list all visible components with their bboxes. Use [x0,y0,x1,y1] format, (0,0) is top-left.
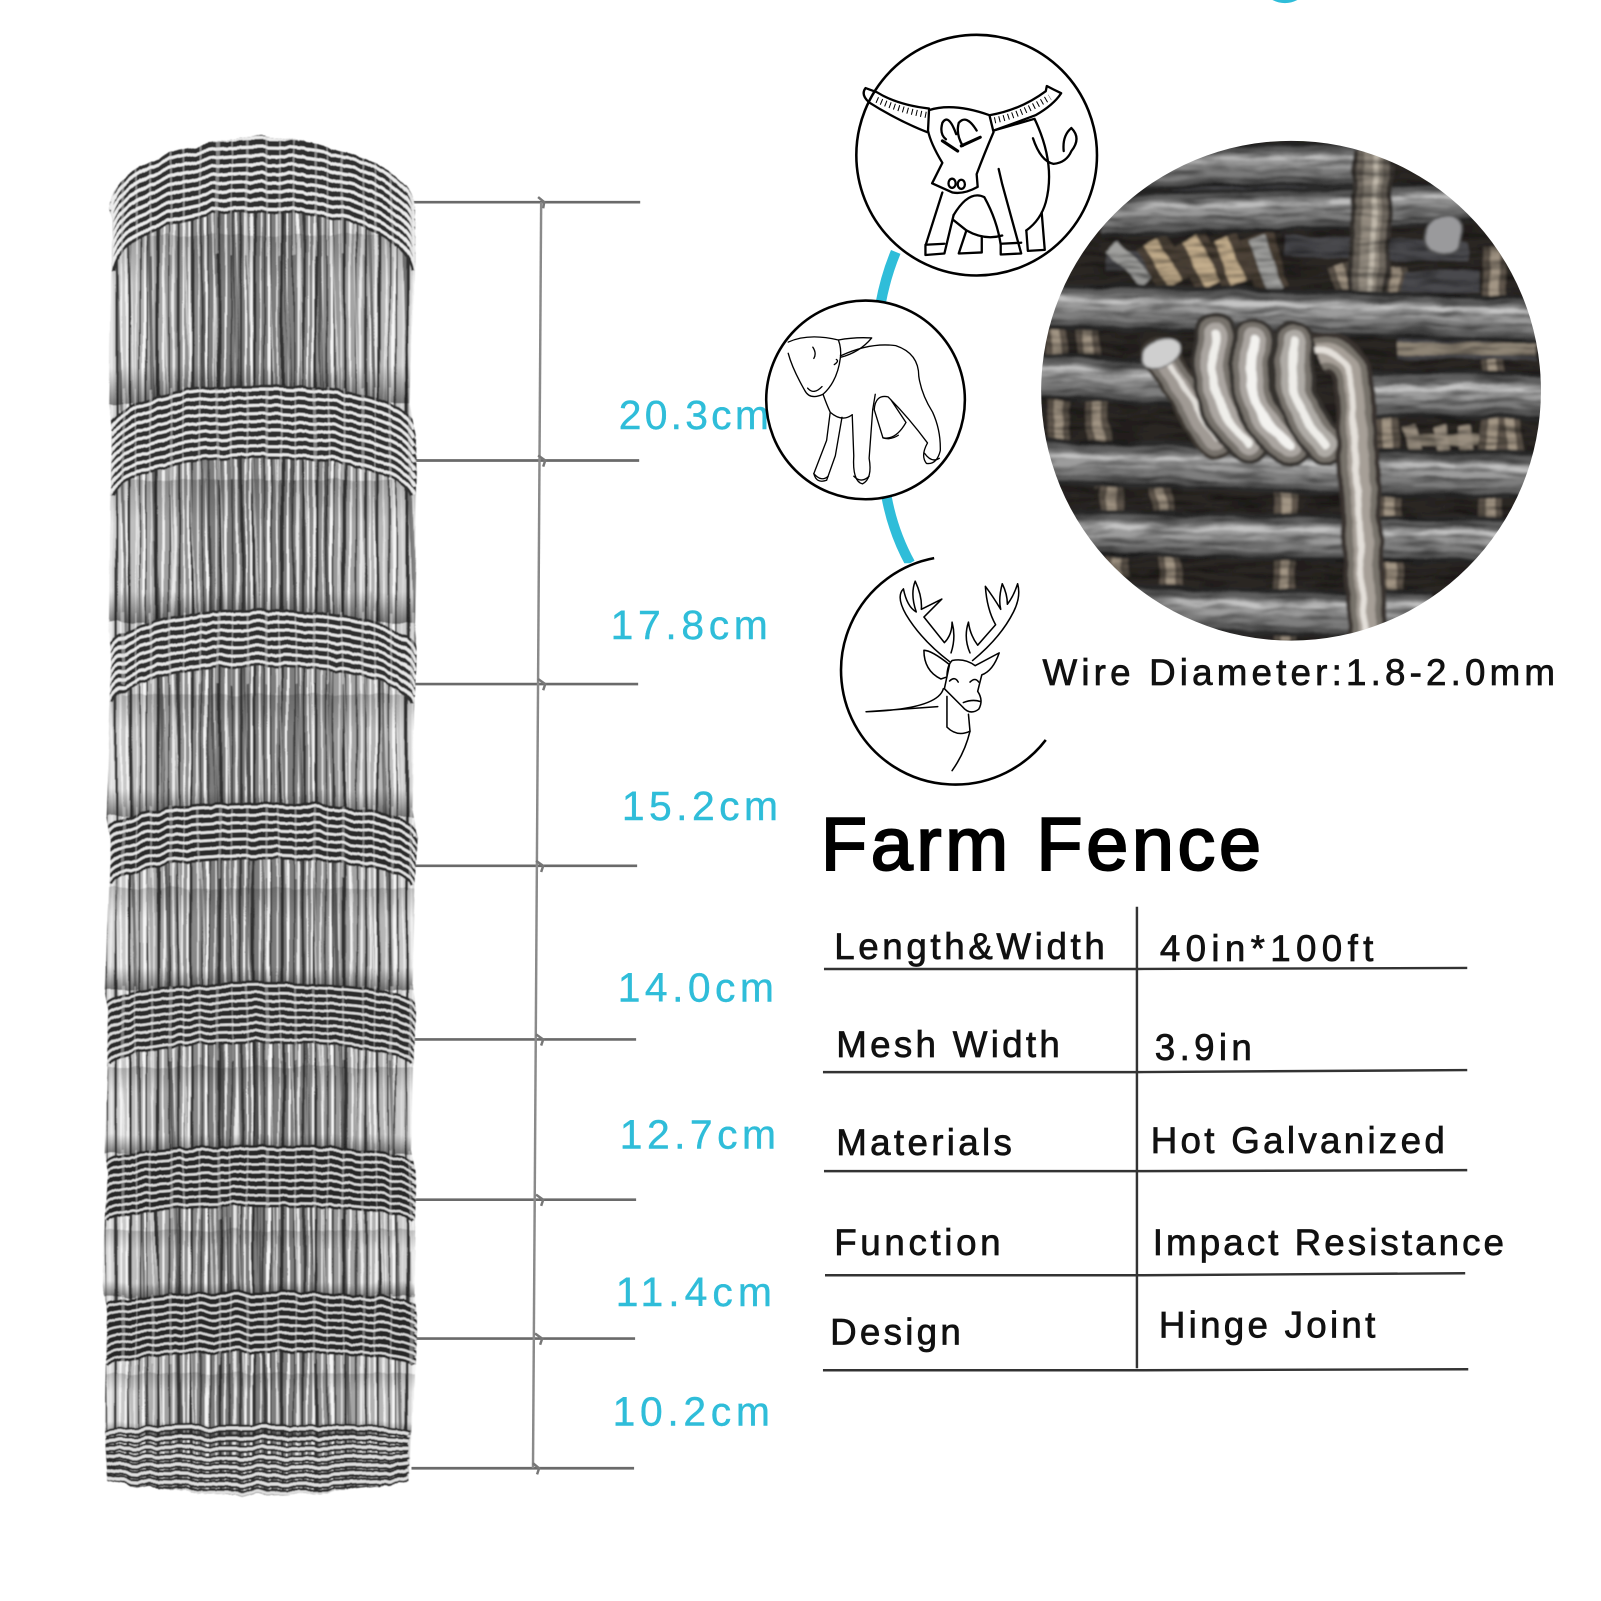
metal surface streaks [1042,141,1541,640]
icon: bull [856,35,1097,275]
dimension wires [411,197,640,1474]
background wires [1054,183,1536,640]
wire band 4 [100,806,423,884]
wire band 3 [100,613,423,702]
wire band 1 [100,133,423,271]
label 20.3cm: 20.3cm [619,392,769,438]
close-up photo of hinge joint [1041,140,1541,641]
icon: lamb [766,301,965,499]
label 12.7cm: 12.7cm [620,1112,776,1158]
lower horizontal wires [1034,299,1551,614]
title: Farm Fence [821,803,1261,887]
cut wire end and coil [1137,215,1462,635]
row: length and width: 40in*100ft [1160,928,1373,969]
row: function: Function [834,1222,1001,1263]
wire band 7 [100,1295,423,1364]
row: materials [836,1120,1445,1163]
caption: wire diameter: Wire Diameter:1.8-2.0mm [1042,652,1555,693]
wire band 5 [100,986,423,1062]
row: design [830,1305,1375,1353]
row: design: Hinge Joint [1159,1305,1375,1346]
row: mesh width: Mesh Width [836,1024,1060,1065]
label 17.8cm: 17.8cm [611,602,768,648]
wire band 2 [100,388,423,494]
upper horizontal wires [1101,158,1474,215]
label 10.2cm: 10.2cm [613,1388,770,1434]
row: function: Impact Resistance [1153,1222,1504,1263]
row: mesh width: 3.9in [1155,1027,1252,1068]
spacing labels [611,392,778,1434]
specification table [823,907,1504,1370]
row: function [834,1222,1504,1263]
label 15.2cm: 15.2cm [622,783,778,829]
row: materials: Hot Galvanized [1151,1120,1445,1161]
label 11.4cm: 11.4cm [616,1269,772,1315]
row: materials: Materials [836,1122,1012,1163]
wire band 8 [105,1427,409,1493]
wire band 6 [100,1149,423,1220]
blue connector arcs [880,0,1298,563]
row: mesh width [836,1024,1252,1068]
animals and close-up photo [766,0,1559,785]
table rules [823,907,1468,1370]
row: length and width [834,926,1373,969]
row: length and width: Length&Width [834,926,1105,967]
wire vertical bar [1367,151,1377,302]
fence roll [100,131,423,1504]
icon: deer [841,558,1046,785]
coil turns [1212,333,1326,447]
label 14.0cm: 14.0cm [618,965,774,1011]
row: design: Design [830,1312,961,1353]
